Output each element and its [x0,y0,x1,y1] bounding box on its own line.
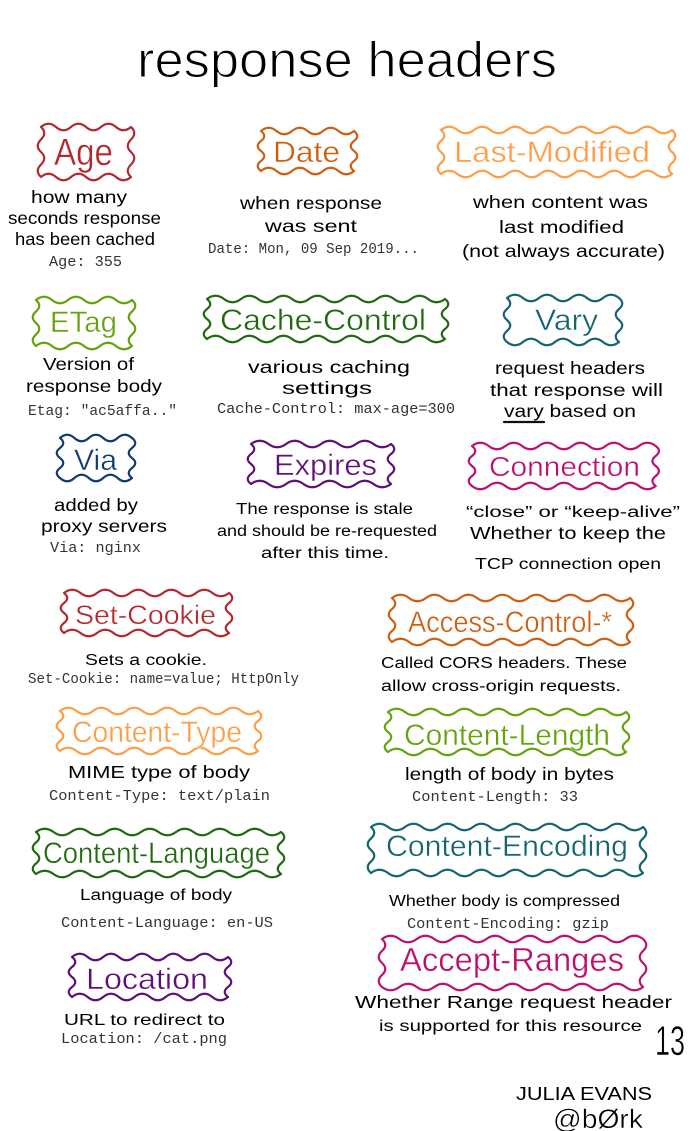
description: Via [41,495,167,557]
description: Last-Modified: last modified [499,217,624,237]
description: Content-Encoding [389,893,620,933]
panel: Access-Control [381,595,633,695]
panel: Via [41,435,167,557]
panel: Set-Cookie [28,590,299,688]
description: Age [8,187,161,271]
badge: Vary: Vary [535,304,598,337]
badge: Access-Control: Access-Control-* [408,606,612,639]
panel: Location [61,954,231,1048]
description: ETag: Etag: "ac5affa.." [28,403,177,420]
description: ETag: response body [26,376,162,396]
description: Via: Via: nginx [50,540,141,557]
panel: Accept-Ranges [355,936,672,1035]
description: Location: Location: /cat.png [61,1031,227,1048]
description: Cache-Control: settings [282,378,372,398]
panel: Content-Type [49,708,270,805]
badge: Location: Location [86,963,208,996]
panel: Expires [217,441,437,562]
description: Content-Type [49,762,270,805]
description: Content-Length: Content-Length: 33 [412,789,578,806]
description: Date: when response [239,193,382,213]
description: Date [208,193,419,258]
panel: Cache-Control [204,296,455,418]
description: Expires: and should be re-requested [217,523,437,540]
badge: Content-Length [385,709,629,755]
description: Location [61,1012,227,1048]
badge: Last-Modified [438,127,675,177]
description: Via: added by [54,495,138,515]
description: Content-Encoding: Whether body is compressed [389,893,620,910]
description: Cache-Control: Cache-Control: max-age=300 [217,401,455,418]
description: Cache-Control: various caching [248,357,410,377]
description: Connection: “close” or “keep-alive” [466,504,680,521]
description: Connection: TCP connection open [475,556,661,573]
badge: Last-Modified: Last-Modified [454,136,650,169]
description: Cache-Control [217,357,455,418]
badge: Vary [504,295,622,345]
badge: Content-Encoding: Content-Encoding [386,830,628,863]
description: Age: Age: 355 [49,254,122,271]
badge: Expires [248,441,394,487]
title: response headers [137,32,557,88]
description: Set-Cookie [28,652,299,688]
badge: Content-Length: Content-Length [404,719,610,752]
description: Location: URL to redirect to [64,1012,225,1029]
description: Last-Modified: when content was [472,192,648,212]
description: Date: was sent [264,216,357,236]
description: Set-Cookie: Sets a cookie. [85,652,207,669]
description: Vary [490,358,663,422]
description: Access-Control: allow cross-origin requests. [381,678,621,695]
description: Accept-Ranges: Whether Range request header [355,992,672,1012]
badge: Content-Type [57,708,261,754]
badge: Content-Language [33,829,284,877]
description: Content-Encoding: Content-Encoding: gzip [407,916,609,933]
badge: Expires: Expires [274,449,377,482]
badge: ETag [33,297,135,349]
description: Vary: vary based on [504,401,636,421]
badge: Access-Control [389,595,633,645]
badge: Connection: Connection [489,451,640,482]
badge: Via: Via [74,444,117,477]
description: Vary: that response will [490,380,663,400]
description: Content-Language [61,887,273,932]
panel: Content-Length [385,709,629,806]
description: Accept-Ranges: is supported for this resource [379,1018,642,1035]
description: Last-Modified [462,192,665,261]
badge: Accept-Ranges [379,936,646,990]
badge: Age [38,124,134,180]
description: ETag [26,354,177,420]
badge: Date: Date [273,136,340,169]
badge: Cache-Control: Cache-Control [220,304,426,337]
description: Content-Language: Content-Language: en-US [61,915,273,932]
panel: Content-Encoding [368,824,646,933]
panel: Age [8,124,161,271]
badge: Set-Cookie [61,590,232,636]
badge: Content-Language: Content-Language [43,837,270,870]
description: Age: how many [31,187,127,207]
signature: JULIA EVANS [516,1084,652,1104]
badge: Date [258,128,357,174]
panel: ETag [26,297,177,420]
description: Content-Length: length of body in bytes [405,764,614,784]
badge: Accept-Ranges: Accept-Ranges [400,941,624,978]
badge: Content-Type: Content-Type [72,716,242,749]
description: Content-Type: Content-Type: text/plain [49,788,270,805]
badge: Cache-Control [204,296,448,342]
description: Accept-Ranges [355,992,672,1035]
badge: ETag: ETag [50,306,117,339]
description: Content-Type: MIME type of body [68,762,250,782]
badge: Set-Cookie: Set-Cookie [75,600,216,630]
description: Content-Length [405,764,614,806]
description: Access-Control: Called CORS headers. These [381,655,627,672]
description: Age: has been cached [15,229,155,249]
description: Connection: Whether to keep the [470,523,666,543]
description: Content-Language: Language of body [80,887,232,904]
badge: Age: Age [54,132,113,174]
description: Date: Date: Mon, 09 Sep 2019... [208,241,419,258]
panel: Last-Modified [438,127,675,261]
description: ETag: Version of [43,354,134,374]
description: Access-Control [381,655,627,695]
badge: Content-Encoding [368,824,646,876]
description: Vary: request headers [495,358,645,378]
description: Age: seconds response [8,208,161,228]
badge: Connection [469,443,659,489]
panel: Connection [466,443,680,573]
panel: Vary [490,295,663,422]
description: Expires [217,501,437,562]
description: Expires: after this time. [261,545,389,562]
panel: Content-Language [33,829,284,932]
description: Last-Modified: (not always accurate) [462,241,665,261]
signature [516,1084,652,1131]
panel: Date [208,128,419,258]
description: Set-Cookie: Set-Cookie: name=value; HttpOnly [28,671,299,688]
description: Expires: The response is stale [236,501,413,518]
badge: Location [69,954,231,1000]
description: Via: proxy servers [41,516,167,536]
description: Connection [466,504,680,573]
